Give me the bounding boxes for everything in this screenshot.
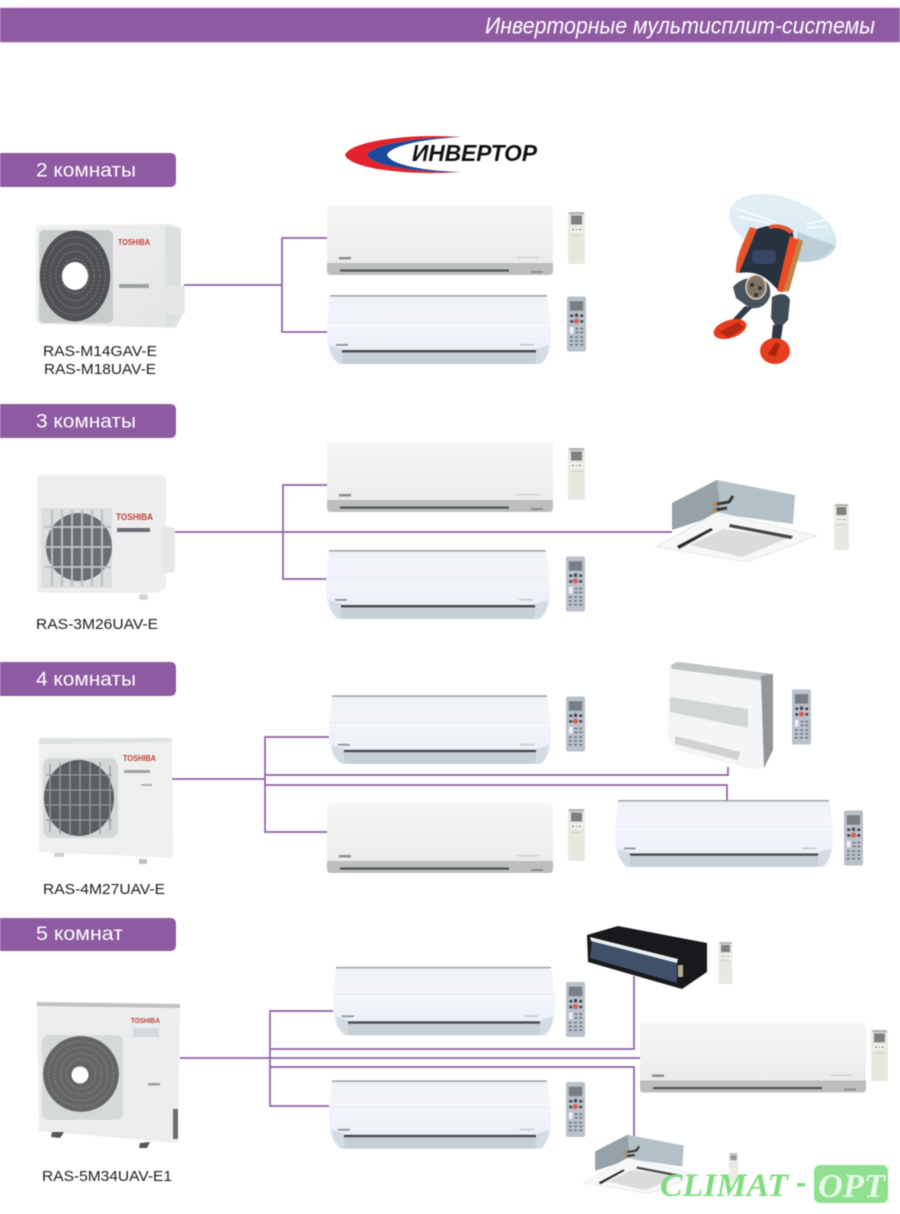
remote: row 1 top [568, 212, 585, 264]
model label: RAS-M14GAV-E / RAS-M18UAV-E [43, 344, 157, 378]
cassette unit: row 2 [656, 480, 817, 562]
model label: RAS-4M27UAV-E: RAS-4M27UAV-E [43, 882, 165, 898]
outdoor unit: RAS-4M27UAV-E: TOSHIBA [123, 754, 156, 763]
model label: RAS-M14GAV-E / RAS-M18UAV-E: RAS-M18UAV-E [44, 362, 156, 378]
remote: row 4 right [871, 1030, 888, 1081]
heading: Инверторные мультисплит-системы [485, 12, 875, 38]
tab: 4 rooms [0, 662, 176, 696]
connection lines: 3 rooms [174, 485, 672, 579]
indoor unit: row 3 bottom right [615, 800, 833, 867]
watermark CLIMAT-OPT: OPT [818, 1168, 886, 1205]
connection lines: 4 rooms [172, 737, 728, 832]
remote: console [792, 689, 811, 745]
remote: row 3 top left [566, 696, 585, 752]
inverter logo [345, 136, 538, 173]
outdoor unit: RAS-M14GAV-E [36, 224, 185, 328]
remote: cassette row 2 [834, 504, 849, 550]
tab: 3 rooms [0, 404, 176, 438]
remote: cassette row 4 [729, 1153, 738, 1183]
outdoor unit: RAS-4M27UAV-E [39, 738, 173, 864]
logo text: ИНВЕРТОР [412, 140, 538, 166]
model label: RAS-3M26UAV-E: RAS-3M26UAV-E [36, 617, 158, 633]
indoor unit: row 4 bottom left [329, 1080, 551, 1149]
tab: 2 rooms [0, 153, 176, 187]
remote: duct [719, 942, 732, 984]
header bar [0, 7, 900, 43]
outdoor unit: RAS-3M26UAV-E [37, 475, 175, 600]
tab: 5 rooms [0, 918, 176, 951]
tab: 4 rooms: 4 комнаты [36, 670, 136, 690]
indoor unit: row 1 bottom [327, 295, 551, 364]
tab: 5 rooms: 5 комнат [36, 924, 123, 945]
remote: row 3 bottom right [844, 810, 863, 866]
remote: row 2 top [568, 448, 585, 500]
indoor unit: row 4 right [640, 1022, 866, 1092]
cassette unit: row 4 [584, 1135, 700, 1194]
outdoor unit: RAS-3M26UAV-E: TOSHIBA [116, 512, 153, 522]
outdoor unit: RAS-5M34UAV-E1 [37, 1002, 180, 1148]
floor console unit: row 3 [668, 662, 773, 770]
watermark CLIMAT-OPT: CLIMAT [660, 1168, 790, 1204]
model label: RAS-5M34UAV-E1: RAS-5M34UAV-E1 [42, 1169, 172, 1185]
remote: row 4 bottom [566, 1082, 585, 1137]
connection lines: 2 rooms [184, 238, 328, 332]
remote: row 3 bottom left [568, 809, 585, 861]
duct unit: row 4 [587, 926, 707, 989]
model label: RAS-M14GAV-E / RAS-M18UAV-E: RAS-M14GAV-E [43, 344, 157, 360]
indoor unit: row 3 bottom left [327, 803, 553, 873]
remote: row 1 bottom [567, 296, 586, 352]
watermark CLIMAT-OPT [660, 1165, 888, 1205]
indoor unit: row 1 top [327, 205, 553, 275]
remote: row 2 bottom [566, 556, 585, 612]
mascot robot [711, 181, 846, 364]
outdoor unit: RAS-5M34UAV-E1: TOSHIBA [131, 1018, 160, 1025]
indoor unit: row 3 top left [329, 695, 551, 764]
indoor unit: row 4 top left [333, 967, 555, 1035]
outdoor unit: RAS-M14GAV-E: TOSHIBA [118, 238, 150, 247]
remote: row 4 top [566, 982, 585, 1037]
indoor unit: row 2 bottom [326, 550, 550, 619]
tab: 2 rooms: 2 комнаты [36, 160, 136, 182]
tab: 3 rooms: 3 комнаты [36, 412, 136, 432]
connection lines: 5 rooms [180, 976, 641, 1136]
indoor unit: row 2 top [327, 442, 553, 512]
